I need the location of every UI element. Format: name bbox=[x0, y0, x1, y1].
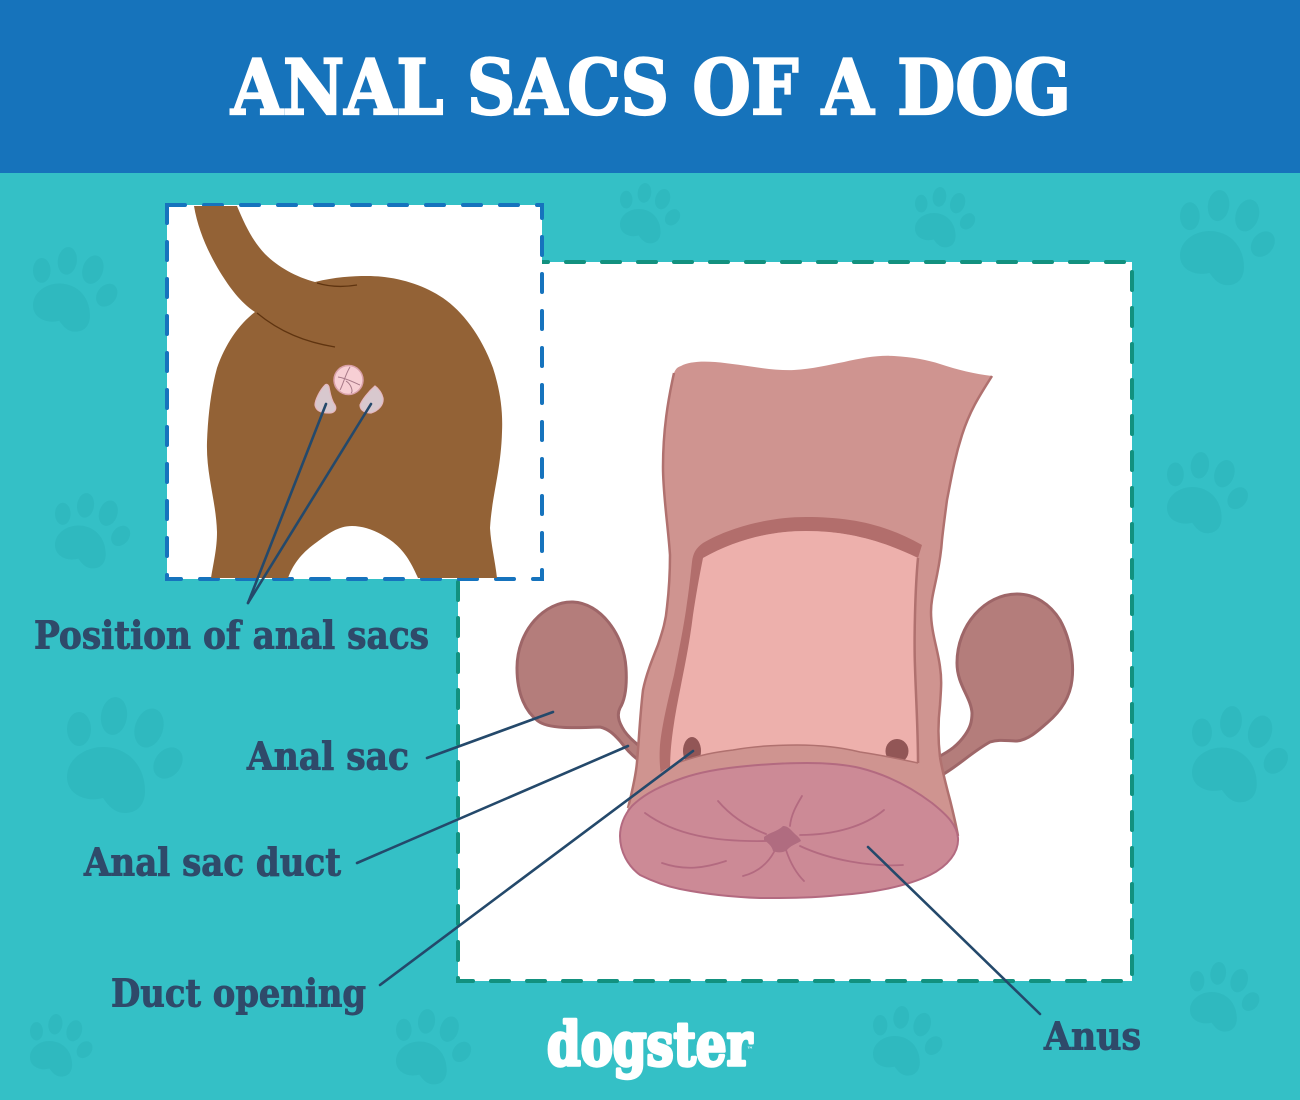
label: anus: Anus bbox=[1043, 1014, 1141, 1058]
left duct opening bbox=[683, 737, 701, 765]
inner rim bbox=[660, 517, 922, 782]
panel: anatomy detail bbox=[458, 262, 1132, 981]
inner wall bbox=[670, 531, 918, 790]
anal opening bbox=[764, 826, 801, 852]
tube lower right edge bbox=[940, 757, 958, 836]
tail creases bbox=[257, 283, 357, 347]
left anal sac and duct bbox=[517, 602, 642, 761]
panel: dog rear view bbox=[167, 205, 542, 579]
small anus bbox=[334, 366, 363, 394]
dogster logo: ™ bbox=[747, 1046, 753, 1053]
label: duct opening: Duct opening bbox=[111, 970, 366, 1016]
background paw prints bbox=[30, 182, 1293, 1084]
anal ring band bbox=[620, 745, 940, 836]
right small sac bbox=[360, 386, 383, 413]
label: anal sac: Anal sac bbox=[246, 734, 409, 778]
anal folds bbox=[645, 796, 903, 881]
right duct opening bbox=[886, 739, 908, 763]
leader lines bbox=[248, 404, 1040, 1014]
label: position of anal sacs: Position of anal sacs bbox=[34, 612, 429, 658]
left small sac bbox=[315, 384, 336, 413]
right anal sac and duct bbox=[938, 594, 1073, 775]
anus disc bbox=[620, 763, 958, 898]
label: anal sac duct: Anal sac duct bbox=[83, 840, 341, 884]
rectum tube bbox=[620, 356, 992, 836]
dogster logo: dogster bbox=[547, 1010, 753, 1080]
title: ANAL SACS OF A DOG bbox=[230, 43, 1071, 132]
dog body and tail bbox=[194, 206, 502, 578]
header banner bbox=[0, 0, 1300, 173]
inner wall right edge bbox=[915, 558, 918, 763]
